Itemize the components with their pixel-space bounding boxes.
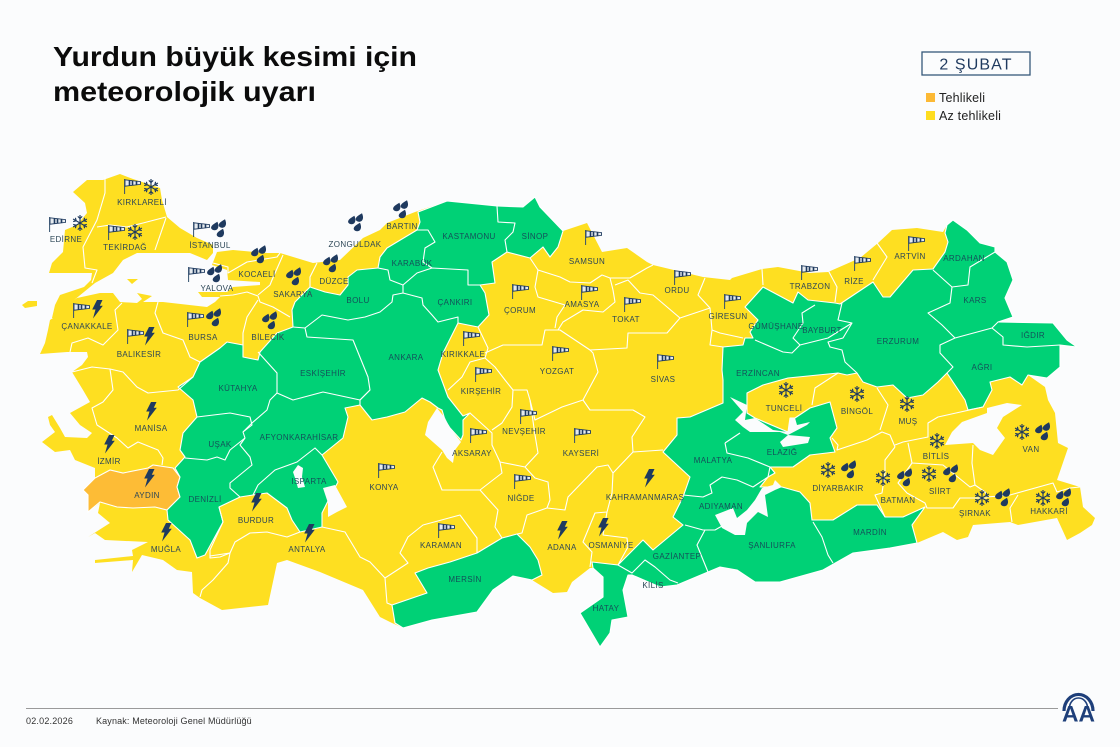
Muş bbox=[899, 396, 917, 426]
Muğla bbox=[151, 523, 181, 554]
Ordu: ORDU bbox=[665, 286, 689, 295]
footer rule bbox=[26, 708, 1058, 710]
Adana bbox=[547, 521, 577, 552]
Bilecik bbox=[251, 311, 285, 342]
Kocaeli bbox=[238, 245, 276, 279]
Edirne bbox=[50, 215, 88, 244]
Şanlıurfa: ŞANLIURFA bbox=[748, 541, 796, 550]
source: Kaynak: Meteoroloji Genel Müdürlüğü bbox=[96, 716, 252, 726]
Balıkesir bbox=[117, 327, 161, 359]
orange province: Aydın bbox=[83, 465, 180, 512]
Bayburt: BAYBURT bbox=[802, 326, 842, 335]
Ordu bbox=[665, 270, 690, 295]
Nevşehir: NEVŞEHİR bbox=[502, 427, 546, 436]
Isparta: ISPARTA bbox=[291, 477, 327, 486]
Tekirdağ bbox=[103, 224, 147, 252]
Adıyaman: ADIYAMAN bbox=[699, 502, 743, 511]
Aksaray: AKSARAY bbox=[452, 449, 492, 458]
Kilis: KİLİS bbox=[642, 581, 664, 590]
Kırklareli: KIRKLARELİ bbox=[117, 198, 167, 207]
date: 02.02.2026 bbox=[26, 716, 73, 726]
Niğde: NİĞDE bbox=[507, 494, 535, 503]
Yalova bbox=[189, 264, 234, 293]
Osmaniye bbox=[588, 518, 634, 550]
Konya bbox=[369, 463, 399, 492]
Kahramanmaraş bbox=[606, 469, 684, 502]
Artvin bbox=[894, 236, 926, 261]
Çanakkale bbox=[61, 300, 113, 331]
Van: VAN bbox=[1023, 445, 1039, 454]
Sinop: SİNOP bbox=[522, 232, 548, 241]
Kırıkkale bbox=[441, 331, 485, 359]
Bursa bbox=[188, 308, 221, 342]
Balıkesir: BALIKESİR bbox=[117, 350, 161, 359]
Bolu: BOLU bbox=[346, 296, 370, 305]
Kırşehir: KIRŞEHİR bbox=[461, 387, 501, 396]
Antalya: ANTALYA bbox=[288, 545, 326, 554]
green provinces: northwest and central bbox=[167, 197, 563, 558]
province borders bbox=[70, 175, 1080, 605]
Denizli: DENİZLİ bbox=[188, 495, 222, 504]
Gümüşhane: GÜMÜŞHANE bbox=[748, 322, 804, 331]
Trabzon: TRABZON bbox=[790, 282, 830, 291]
Düzce: DÜZCE bbox=[319, 277, 349, 286]
Mardin: MARDİN bbox=[853, 528, 887, 537]
Zonguldak: ZONGULDAK bbox=[329, 240, 382, 249]
Ankara: ANKARA bbox=[388, 353, 424, 362]
title line 1: Yurdun büyük kesimi için bbox=[53, 41, 417, 72]
Nevşehir bbox=[502, 409, 546, 436]
Bartın bbox=[386, 200, 418, 231]
Amasya: AMASYA bbox=[565, 300, 600, 309]
Bitlis bbox=[923, 433, 949, 461]
date badge: 2 ŞUBAT bbox=[939, 56, 1013, 74]
Sakarya bbox=[273, 267, 313, 299]
yellow provinces base bbox=[22, 174, 1095, 647]
İstanbul bbox=[189, 219, 231, 250]
Kocaeli: KOCAELİ bbox=[238, 270, 276, 279]
logo: AA: AA bbox=[1062, 702, 1095, 726]
Hakkari: HAKKARİ bbox=[1030, 507, 1068, 516]
Kütahya: KÜTAHYA bbox=[218, 384, 258, 393]
Ardahan: ARDAHAN bbox=[943, 254, 985, 263]
title line 2: meteorolojik uyarı bbox=[53, 76, 316, 107]
Çorum bbox=[504, 284, 536, 315]
Burdur bbox=[238, 493, 274, 525]
Tokat bbox=[612, 297, 640, 324]
Kahramanmaraş: KAHRAMANMARAŞ bbox=[606, 493, 684, 502]
Aydın bbox=[134, 469, 160, 500]
Aksaray bbox=[452, 428, 492, 458]
İzmir: İZMİR bbox=[97, 457, 121, 466]
Aydın: AYDIN bbox=[134, 491, 160, 500]
Şırnak bbox=[959, 488, 1010, 518]
Çankırı: ÇANKIRI bbox=[438, 298, 472, 307]
Şırnak: ŞIRNAK bbox=[959, 509, 991, 518]
Kars: KARS bbox=[963, 296, 987, 305]
İstanbul: İSTANBUL bbox=[189, 241, 231, 250]
Samsun: SAMSUN bbox=[569, 257, 605, 266]
Siirt: SİİRT bbox=[929, 487, 951, 496]
Bilecik: BİLECİK bbox=[251, 333, 285, 342]
Yozgat: YOZGAT bbox=[540, 367, 574, 376]
Bingöl bbox=[841, 386, 873, 416]
Karabük: KARABÜK bbox=[392, 259, 433, 268]
Diyarbakır bbox=[812, 460, 864, 493]
Muğla: MUĞLA bbox=[151, 545, 181, 554]
Ağrı: AĞRI bbox=[972, 363, 992, 372]
Mersin: MERSİN bbox=[448, 575, 482, 584]
Zonguldak bbox=[329, 213, 382, 249]
Osmaniye: OSMANİYE bbox=[588, 541, 634, 550]
map of Turkey bbox=[22, 174, 1095, 647]
Hakkari bbox=[1030, 488, 1071, 516]
Gaziantep: GAZİANTEP bbox=[653, 552, 701, 561]
Karaman: KARAMAN bbox=[420, 541, 462, 550]
Artvin: ARTVİN bbox=[894, 252, 926, 261]
Düzce bbox=[319, 254, 349, 286]
Erzincan: ERZİNCAN bbox=[736, 369, 780, 378]
Batman bbox=[875, 468, 915, 505]
Kırıkkale: KIRIKKALE bbox=[441, 350, 485, 359]
Bingöl: BİNGÖL bbox=[841, 407, 873, 416]
Afyonkarahisar: AFYONKARAHİSAR bbox=[260, 433, 338, 442]
Elazığ: ELAZIĞ bbox=[767, 448, 797, 457]
Eskişehir: ESKİŞEHİR bbox=[300, 369, 346, 378]
Diyarbakır: DİYARBAKIR bbox=[812, 484, 864, 493]
Malatya: MALATYA bbox=[694, 456, 733, 465]
Kastamonu: KASTAMONU bbox=[442, 232, 496, 241]
legend: Az tehlikeli bbox=[939, 109, 1001, 123]
Trabzon bbox=[790, 265, 830, 291]
Yalova: YALOVA bbox=[201, 284, 234, 293]
Kırklareli bbox=[117, 179, 167, 207]
Rize bbox=[844, 256, 870, 286]
Tokat: TOKAT bbox=[612, 315, 640, 324]
Adana: ADANA bbox=[547, 543, 577, 552]
Kayseri bbox=[563, 428, 599, 458]
Siirt bbox=[921, 464, 958, 496]
Manisa bbox=[135, 402, 168, 433]
Kayseri: KAYSERİ bbox=[563, 449, 599, 458]
legend bbox=[926, 91, 1001, 123]
Sivas: SİVAS bbox=[651, 375, 675, 384]
Çorum: ÇORUM bbox=[504, 306, 536, 315]
Yozgat bbox=[540, 346, 574, 376]
province labels and weather icons bbox=[50, 179, 1071, 590]
Tunceli bbox=[766, 382, 802, 413]
Rize: RİZE bbox=[844, 277, 864, 286]
Giresun bbox=[709, 294, 747, 321]
Kırşehir bbox=[461, 367, 501, 396]
green province labels bbox=[188, 232, 1045, 613]
Konya: KONYA bbox=[369, 483, 399, 492]
lakes bbox=[293, 397, 1022, 535]
Erzurum: ERZURUM bbox=[877, 337, 919, 346]
legend: Tehlikeli bbox=[939, 91, 985, 105]
Muş: MUŞ bbox=[899, 417, 917, 426]
Burdur: BURDUR bbox=[238, 516, 274, 525]
Niğde bbox=[507, 474, 535, 503]
Sakarya: SAKARYA bbox=[273, 290, 313, 299]
Edirne: EDİRNE bbox=[50, 235, 82, 244]
Antalya bbox=[288, 524, 326, 554]
green provinces: east and southeast bbox=[580, 220, 1077, 647]
Batman: BATMAN bbox=[881, 496, 915, 505]
Bitlis: BİTLİS bbox=[923, 452, 949, 461]
Van bbox=[1014, 422, 1050, 454]
date badge bbox=[922, 52, 1030, 75]
Tekirdağ: TEKİRDAĞ bbox=[103, 243, 147, 252]
Uşak: UŞAK bbox=[208, 440, 232, 449]
Hatay: HATAY bbox=[593, 604, 620, 613]
Iğdır: IĞDIR bbox=[1021, 331, 1045, 340]
Samsun bbox=[569, 230, 605, 266]
Sivas bbox=[651, 354, 675, 384]
green province: Mersin bbox=[392, 534, 542, 628]
Çanakkale: ÇANAKKALE bbox=[61, 322, 113, 331]
Bartın: BARTIN bbox=[386, 222, 418, 231]
Tunceli: TUNCELİ bbox=[766, 404, 802, 413]
Amasya bbox=[565, 285, 600, 309]
İzmir bbox=[97, 435, 121, 466]
Giresun: GİRESUN bbox=[709, 312, 747, 321]
Karaman bbox=[420, 523, 462, 550]
Bursa: BURSA bbox=[188, 333, 218, 342]
Manisa: MANİSA bbox=[135, 424, 168, 433]
